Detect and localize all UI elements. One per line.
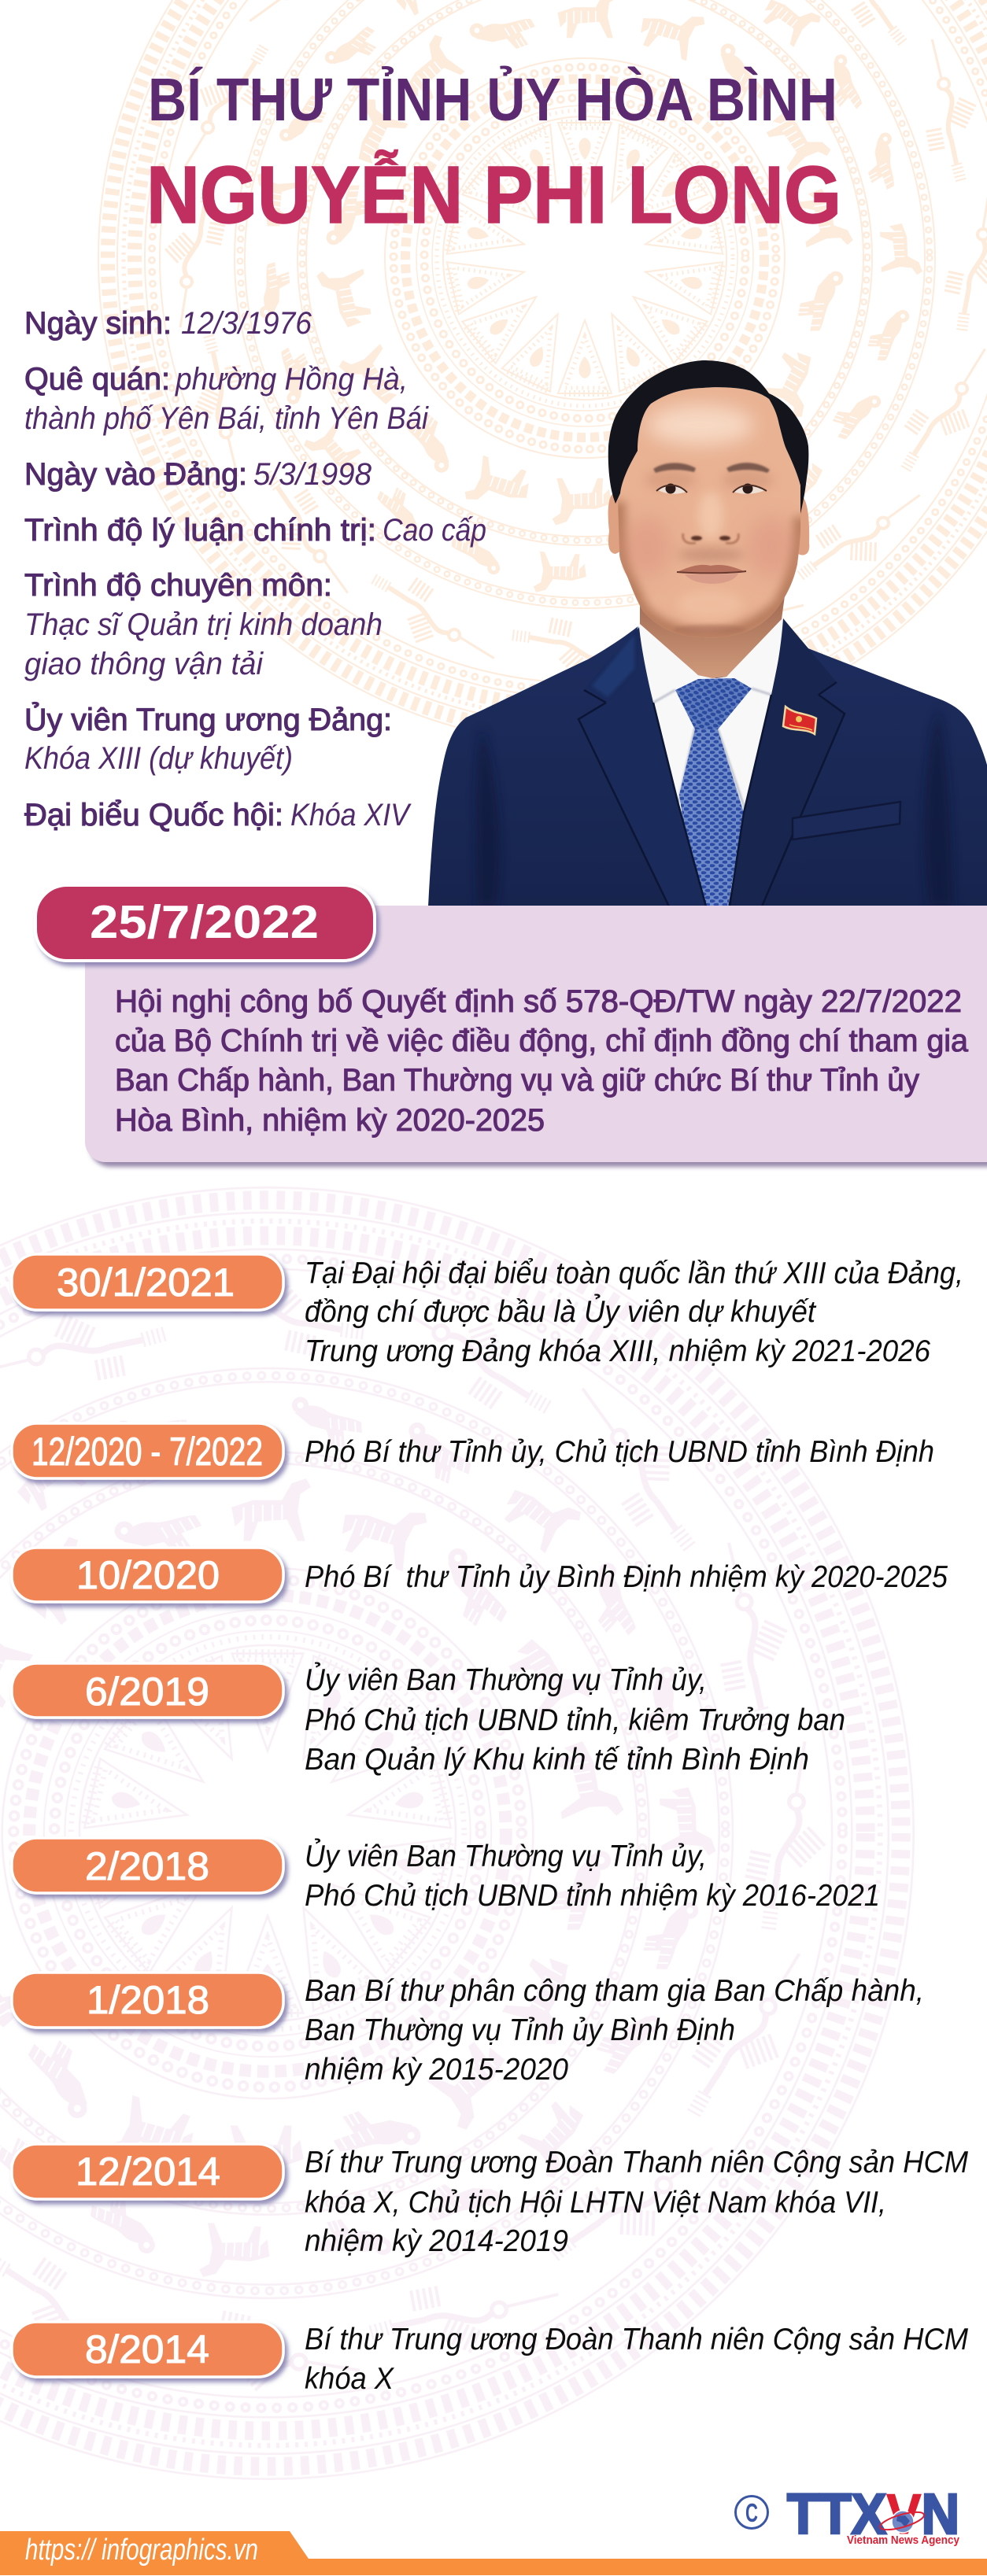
birth date: Ngày sinh: (24, 306, 172, 341)
hometown: Quê quán: (24, 362, 170, 397)
upper lip shadow (678, 548, 744, 562)
chin light (682, 593, 738, 615)
hometown: thành phố Yên Bái, tỉnh Yên Bái (24, 401, 429, 436)
entry 6/2019: Ban Quản lý Khu kinh tế tỉnh Bình Định (305, 1743, 809, 1777)
title line: office: BÍ THƯ TỈNH ỦY HÒA BÌNH (148, 65, 837, 134)
icon: copyright (735, 2496, 768, 2529)
national assembly: Đại biểu Quốc hội: (24, 798, 283, 832)
central committee: Khóa XIII (dự khuyết) (24, 741, 293, 776)
political theory level: Cao cấp (383, 513, 486, 548)
entry 8/2014 (12, 2322, 968, 2396)
entry 2/2018: Ủy viên Ban Thường vụ Tỉnh ủy, (305, 1838, 707, 1873)
entry 2/2018 (12, 1838, 880, 1913)
orange band (0, 2531, 987, 2575)
central committee (24, 701, 392, 776)
bronze drum pattern: top (98, 0, 987, 744)
title line: name: NGUYỄN PHI LONG (146, 149, 841, 240)
entry 1/2018: 1/2018 (87, 1978, 209, 2022)
party pin (783, 707, 816, 734)
professional qualification: Thạc sĩ Quản trị kinh doanh (24, 607, 383, 642)
eye sockets (647, 471, 694, 489)
eyebrows (653, 463, 770, 473)
appointment text: của Bộ Chính trị về việc điều động, chỉ định đồng chí tham gia (115, 1024, 969, 1058)
date badge (35, 885, 375, 961)
entry 10/2020 (12, 1548, 948, 1602)
birth date: 12/3/1976 (181, 306, 312, 341)
neck (640, 590, 786, 678)
right lapel (741, 618, 843, 833)
face edge shading (618, 501, 800, 637)
nose (683, 533, 738, 543)
collar light (592, 634, 634, 697)
eyes (656, 483, 767, 494)
left lapel (636, 627, 705, 906)
lilac panel (85, 906, 987, 1162)
appointment text: Ban Chấp hành, Ban Thường vụ và giữ chức Bí thư Tỉnh ủy (115, 1063, 919, 1098)
title (146, 65, 841, 240)
entry 8/2014: khóa X (305, 2362, 395, 2396)
entry 30/1/2021: 30/1/2021 (57, 1260, 235, 1305)
personal details (24, 306, 486, 832)
ears (608, 493, 809, 555)
entry 30/1/2021 (12, 1254, 963, 1368)
forehead highlight (647, 404, 754, 445)
icon: copyright: C (745, 2498, 758, 2527)
entry 12/2014: nhiệm kỳ 2014-2019 (305, 2224, 568, 2258)
central committee: Ủy viên Trung ương Đảng: (24, 701, 392, 737)
entry 12/2020 - 7/2022 (12, 1423, 934, 1478)
date badge: 25/7/2022 (90, 896, 319, 948)
birth date (24, 306, 312, 341)
entry 6/2019: Phó Chủ tịch UBND tỉnh, kiêm Trưởng ban (305, 1703, 845, 1737)
sleeve seams (475, 708, 954, 906)
entry 1/2018: nhiệm kỳ 2015-2020 (305, 2053, 568, 2087)
bronze drum pattern: timeline (0, 1187, 914, 2479)
footer bar (0, 2531, 987, 2575)
lapel edges (579, 682, 845, 906)
suit jacket (428, 618, 987, 906)
political theory level: Trình độ lý luận chính trị: (24, 513, 376, 548)
hometown (24, 362, 429, 436)
party entry date: 5/3/1998 (253, 457, 372, 492)
appointment text: Hòa Bình, nhiệm kỳ 2020-2025 (115, 1103, 545, 1138)
professional qualification: giao thông vận tải (24, 647, 264, 681)
party entry date (24, 457, 372, 492)
national assembly: Khóa XIV (290, 798, 412, 832)
website: https:// infographics.vn (25, 2534, 258, 2567)
shirt (636, 615, 786, 906)
icon: globe (878, 2508, 926, 2534)
professional qualification: Trình độ chuyên môn: (24, 568, 332, 603)
entry 12/2020 - 7/2022: Phó Bí thư Tỉnh ủy, Chủ tịch UBND tỉnh Bình Định (305, 1435, 934, 1469)
logo: TTXVN (735, 2483, 960, 2547)
entry 2/2018: 2/2018 (85, 1844, 209, 1888)
entry 1/2018: Ban Thường vụ Tỉnh ủy Bình Định (305, 2013, 735, 2047)
nose highlight (698, 492, 723, 539)
entry 30/1/2021: Trung ương Đảng khóa XIII, nhiệm kỳ 2021-2026 (305, 1334, 930, 1368)
national assembly (24, 798, 412, 832)
party entry date: Ngày vào Đảng: (24, 457, 247, 492)
portrait photo (428, 360, 987, 906)
hair (608, 360, 808, 514)
entry 1/2018 (12, 1973, 924, 2087)
entry 10/2020: Phó Bí thư Tỉnh ủy Bình Định nhiệm kỳ 2020-2025 (305, 1560, 948, 1594)
chin crease (674, 625, 746, 634)
appointment text: Hội nghị công bố Quyết định số 578-QĐ/TW ngày 22/7/2022 (115, 984, 962, 1019)
entry 12/2014: khóa X, Chủ tịch Hội LHTN Việt Nam khóa VII, (305, 2186, 886, 2220)
professional qualification (24, 568, 383, 681)
cheek colour (623, 517, 671, 577)
hometown: phường Hồng Hà, (175, 362, 408, 397)
appointment text (115, 984, 969, 1138)
entry 30/1/2021: đồng chí được bầu là Ủy viên dự khuyết (305, 1294, 817, 1329)
entry 12/2020 - 7/2022: 12/2020 - 7/2022 (31, 1430, 263, 1474)
agency mark: TTXVN (787, 2483, 959, 2546)
timeline (12, 1254, 968, 2396)
panel: latest appointment (35, 885, 987, 1162)
entry 2/2018: Phó Chủ tịch UBND tỉnh nhiệm kỳ 2016-2021 (305, 1879, 880, 1913)
entry 8/2014: 8/2014 (85, 2327, 209, 2371)
entry 12/2014 (12, 2144, 968, 2258)
face (618, 387, 801, 637)
entry 6/2019: 6/2019 (85, 1670, 209, 1714)
entry 12/2014: 12/2014 (76, 2150, 220, 2194)
shirt shading (653, 688, 771, 810)
mouth (677, 565, 746, 584)
entry 1/2018: Ban Bí thư phân công tham gia Ban Chấp hành, (305, 1974, 924, 2008)
entry 10/2020: 10/2020 (76, 1553, 220, 1597)
agency name: Vietnam News Agency (847, 2534, 960, 2547)
entry 6/2019: Ủy viên Ban Thường vụ Tỉnh ủy, (305, 1662, 707, 1697)
breast pocket (793, 802, 900, 840)
entry 6/2019 (12, 1662, 845, 1777)
tie (675, 678, 752, 906)
